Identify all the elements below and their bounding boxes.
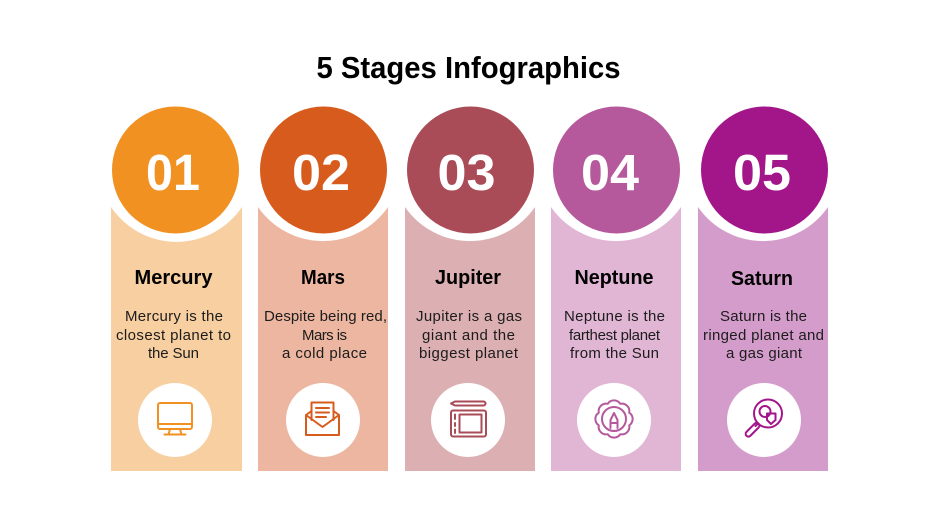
description: Mercury is the bbox=[125, 308, 223, 325]
description bbox=[416, 308, 522, 362]
description bbox=[564, 308, 665, 362]
panel: Saturn bbox=[698, 106, 828, 471]
heading: Mercury bbox=[134, 267, 213, 289]
card background bbox=[551, 207, 681, 471]
number: 02 bbox=[292, 144, 350, 201]
heading: Mars bbox=[301, 267, 345, 289]
panel: Jupiter bbox=[405, 106, 535, 471]
icon: monitor bbox=[138, 383, 212, 457]
title: 5 Stages Infographics bbox=[316, 50, 620, 85]
number circle bbox=[260, 106, 387, 234]
icon: magnifier with shapes bbox=[727, 383, 801, 457]
description: closest planet to bbox=[116, 327, 231, 344]
number: 05 bbox=[733, 144, 791, 201]
number: 04 bbox=[581, 144, 640, 201]
description bbox=[264, 308, 387, 362]
description: a gas giant bbox=[726, 345, 803, 362]
icon: gear with pen nib bbox=[577, 383, 651, 457]
description bbox=[703, 308, 824, 362]
description: Jupiter is a gas bbox=[416, 308, 522, 325]
description: a cold place bbox=[282, 345, 367, 362]
number: 03 bbox=[438, 144, 496, 201]
number circle bbox=[553, 106, 680, 234]
icon: drawing tablet bbox=[431, 383, 505, 457]
description: Neptune is the bbox=[564, 308, 665, 325]
card background bbox=[405, 207, 535, 471]
description bbox=[116, 308, 231, 362]
card background bbox=[258, 207, 388, 471]
description: Saturn is the bbox=[720, 308, 807, 325]
description: biggest planet bbox=[419, 345, 519, 362]
number circle bbox=[112, 106, 239, 234]
panel: Mercury bbox=[111, 106, 242, 471]
description: Despite being red, bbox=[264, 308, 387, 325]
number circle bbox=[407, 106, 534, 234]
card background bbox=[698, 207, 828, 471]
heading: Jupiter bbox=[435, 267, 501, 289]
panel: Neptune bbox=[551, 106, 681, 471]
description: farthest planet bbox=[569, 327, 661, 344]
card background bbox=[111, 207, 242, 471]
description: Mars is bbox=[302, 327, 347, 344]
description: ringed planet and bbox=[703, 327, 824, 344]
description: giant and the bbox=[422, 327, 515, 344]
icon: open envelope bbox=[286, 383, 360, 457]
description: from the Sun bbox=[570, 345, 659, 362]
panel: Mars bbox=[258, 106, 388, 471]
number: 01 bbox=[146, 144, 200, 201]
heading: Neptune bbox=[574, 267, 654, 289]
number circle bbox=[701, 106, 828, 234]
heading: Saturn bbox=[731, 268, 793, 290]
description: the Sun bbox=[148, 345, 199, 362]
